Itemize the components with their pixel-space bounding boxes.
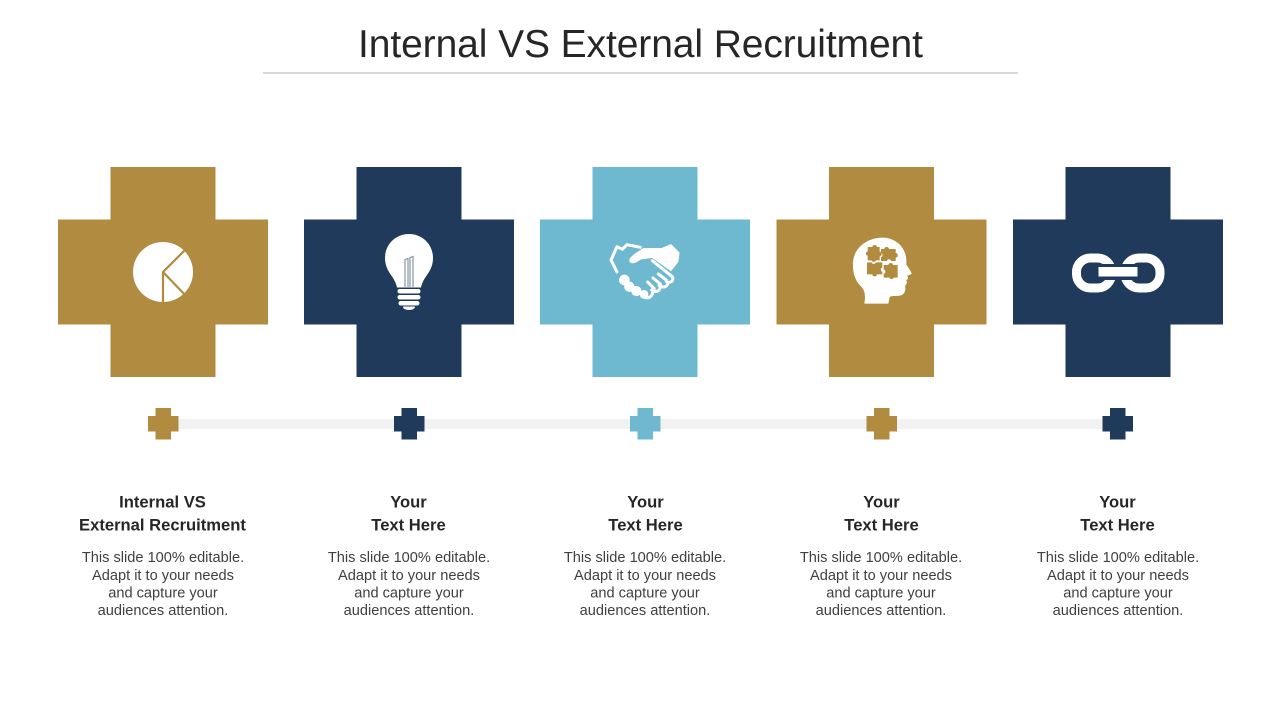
- text block 3: This slide 100% editable.: [564, 550, 726, 566]
- text block 2: Text Here: [371, 516, 446, 534]
- text block 3: [564, 492, 726, 619]
- text block 2: audiences attention.: [344, 603, 474, 619]
- text block 1: External Recruitment: [79, 516, 246, 534]
- text block 5: and capture your: [1063, 586, 1173, 602]
- text block 5: [1037, 492, 1199, 619]
- text block 2: Your: [390, 492, 427, 512]
- text block 2: and capture your: [354, 586, 464, 602]
- text block 2: [328, 492, 490, 619]
- icon: chain link: [1076, 258, 1160, 288]
- text block 1: audiences attention.: [98, 603, 228, 619]
- text block 5: Adapt it to your needs: [1047, 568, 1189, 584]
- text block 2: This slide 100% editable.: [328, 550, 490, 566]
- panel: cross 2 navy: [304, 167, 514, 377]
- marker 1: [148, 408, 178, 440]
- text block 5: This slide 100% editable.: [1037, 550, 1199, 566]
- marker 5: [1102, 408, 1133, 440]
- text block 4: This slide 100% editable.: [800, 550, 962, 566]
- icon: pie chart: [133, 242, 193, 303]
- title: Internal VS External Recruitment: [358, 23, 923, 66]
- icon: handshake: [611, 244, 680, 299]
- text block 4: Your: [863, 492, 900, 512]
- text block 5: Text Here: [1080, 516, 1155, 534]
- text block 3: Text Here: [608, 516, 683, 534]
- text block 2: Adapt it to your needs: [338, 568, 480, 584]
- text block 5: Your: [1099, 492, 1136, 512]
- panel: cross 3 light blue: [540, 167, 750, 377]
- panel: cross 4 gold: [776, 167, 986, 377]
- text block 4: and capture your: [826, 586, 936, 602]
- marker 2: [394, 408, 424, 440]
- panel: cross 5 navy: [1013, 167, 1223, 377]
- text block 3: audiences attention.: [580, 603, 710, 619]
- text block 4: Text Here: [844, 516, 919, 534]
- icon: head with puzzle pieces: [853, 238, 912, 304]
- text block 1: This slide 100% editable.: [82, 550, 244, 566]
- text block 1: Adapt it to your needs: [92, 568, 234, 584]
- text block 1: and capture your: [108, 586, 218, 602]
- text block 5: audiences attention.: [1053, 603, 1183, 619]
- marker 3: [630, 408, 660, 440]
- icon: light bulb: [385, 234, 433, 310]
- text block 1: [79, 492, 246, 619]
- timeline connector: [163, 419, 1118, 429]
- text block 3: Your: [627, 492, 664, 512]
- text block 4: Adapt it to your needs: [810, 568, 952, 584]
- panel: cross 1 gold: [58, 167, 268, 377]
- text block 1: Internal VS: [119, 492, 206, 512]
- marker 4: [866, 408, 897, 440]
- text block 3: and capture your: [590, 586, 700, 602]
- text block 4: [800, 492, 962, 619]
- text block 3: Adapt it to your needs: [574, 568, 716, 584]
- text block 4: audiences attention.: [816, 603, 946, 619]
